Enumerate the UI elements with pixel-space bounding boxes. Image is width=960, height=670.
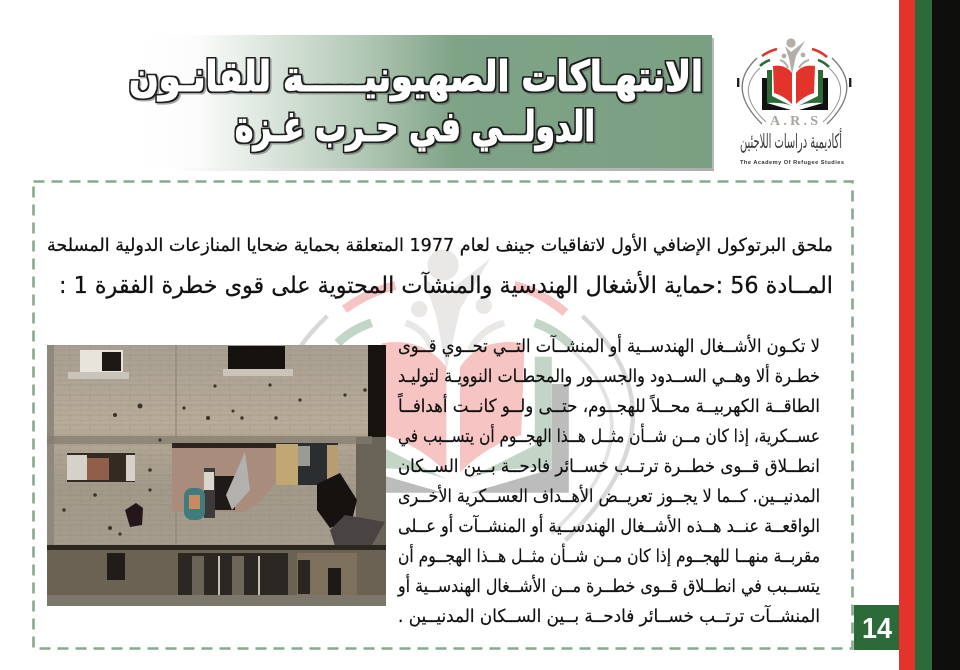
subtitle line: ملحق البرتوكول الإضافي الأول لاتفاقيات جينف لعام 1977 المتعلقة بحماية ضحايا المنازعات الدولية المسلحة bbox=[47, 234, 833, 256]
title banner bbox=[140, 35, 714, 171]
upper right window bbox=[228, 346, 285, 369]
article heading: المــادة 56 :حماية الأشغال الهندسية والمنشآت المحتوية على قوى خطرة الفقرة 1 : bbox=[59, 271, 833, 299]
body paragraph: المنشــآت ترتــب خســائر فادحــة بــين الســكان المدنيــين . bbox=[398, 604, 820, 627]
logo: Academy of Refugee Studies: أكاديمية دراسات اللاجئين bbox=[740, 128, 842, 153]
middle left window bbox=[67, 453, 135, 482]
logo english name: The Academy Of Refugee Studies bbox=[740, 160, 844, 166]
body paragraph: انطــلاق قــوى خطــرة ترتــب خســائر فادحــة بــين الســكان bbox=[398, 456, 820, 477]
watermark logo bbox=[277, 249, 633, 540]
side stripes bbox=[899, 0, 960, 670]
body paragraph: لا تكـون الأشــغال الهندســية أو المنشــآت التــي تحــوي قــوى bbox=[398, 334, 820, 357]
bullet holes bbox=[62, 383, 367, 536]
body paragraph bbox=[397, 334, 820, 627]
shutters right window bbox=[276, 443, 338, 485]
broken wall hole bbox=[317, 473, 357, 528]
title line 2: الدولــي في حـرب غـزة bbox=[235, 102, 595, 152]
body paragraph: الواقعــة عنــد هــذه الأشــغال الهندســية أو المنشــآت أو عــلى bbox=[398, 514, 820, 537]
logo: Academy of Refugee Studies bbox=[737, 38, 851, 166]
page number: 14 bbox=[862, 613, 892, 645]
dashed content frame bbox=[34, 182, 852, 648]
logo initials: A.R.S bbox=[770, 114, 818, 129]
blast opening bbox=[172, 443, 277, 512]
page number bbox=[854, 605, 899, 650]
photo: damaged building bbox=[47, 345, 386, 606]
man and portrait bbox=[204, 468, 215, 518]
body paragraph: خطـرة ألا وهــي الســدود والجســور والمحطـات النوويـة لتوليـد bbox=[398, 364, 820, 387]
body paragraph: عســكرية، إذا كان مــن شــأن مثــل هــذا الهجــوم أن يتســبب في bbox=[398, 423, 820, 447]
body paragraph: الطاقــة الكهربيــة محــلاً للهجــوم، حتــى ولــو كانــت أهدافــاً bbox=[397, 393, 820, 417]
title line 1: الانتهـاكات الصهيونيـــــة للقانـون bbox=[129, 52, 703, 102]
ground floor bbox=[47, 545, 386, 606]
body paragraph: المدنيــين. كــما لا يجــوز تعريــض الأهــداف العســكرية الأخــرى bbox=[398, 485, 820, 507]
shell hole bbox=[125, 503, 143, 527]
body paragraph: مقربــة منهــا للهجــوم إذا كان مــن شــأن مثــل هــذا الهجــوم أن bbox=[398, 543, 820, 567]
body paragraph: يتســبب في انطــلاق قــوى خطــرة مــن الأشــغال الهندســية أو bbox=[397, 574, 820, 597]
upper left window bbox=[80, 350, 123, 373]
